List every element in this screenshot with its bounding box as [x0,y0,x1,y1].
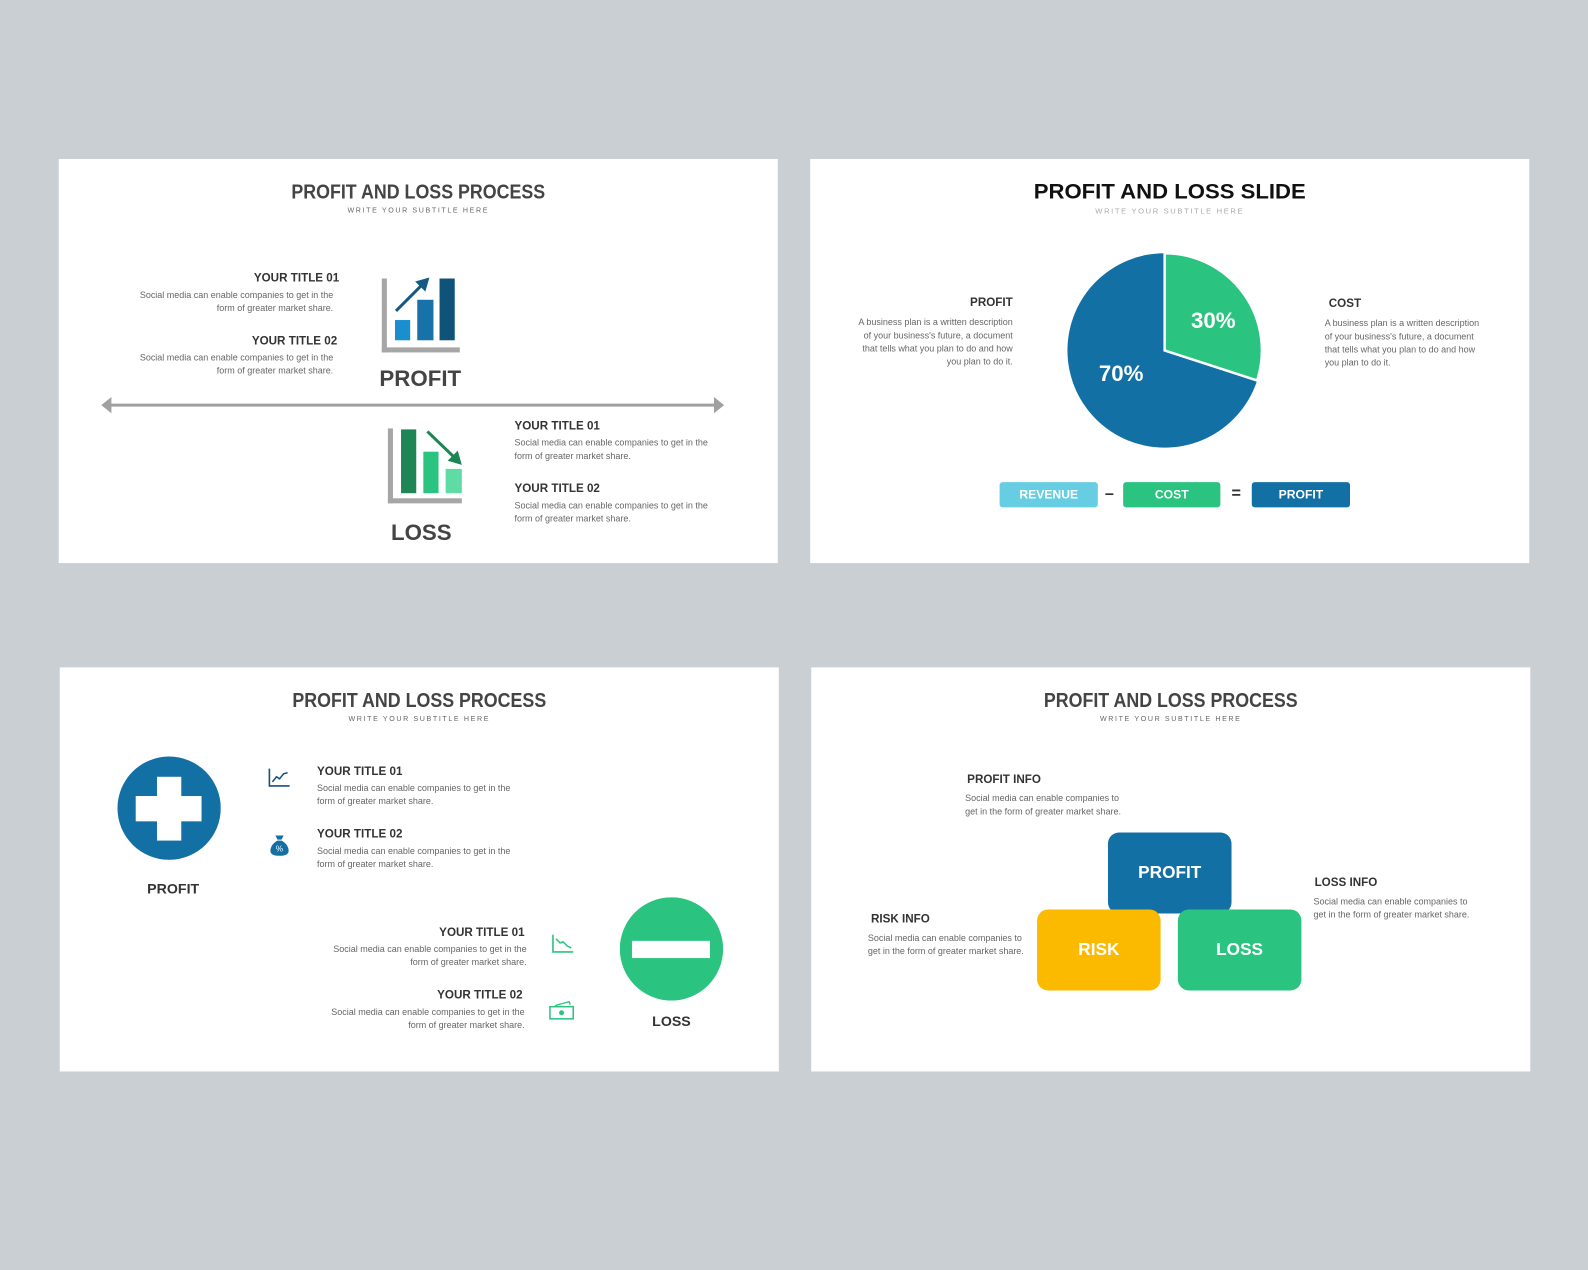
text block: risk info: get in the form of greater market share. [868,946,1024,956]
text block: loss title 02: YOUR TITLE 02 [437,989,523,1002]
pie chart: 70% [1099,361,1144,386]
label: LOSS: LOSS [391,520,452,545]
title: PROFIT AND LOSS PROCESS [291,181,545,204]
text block: cost: of your business's future, a document [1325,331,1474,341]
text block: loss title 02: Social media can enable companies to get in the [514,500,708,510]
text block: loss info [1314,877,1469,920]
text block: loss info: get in the form of greater market share. [1314,909,1469,920]
text block: profit: PROFIT [970,297,1013,309]
subtitle: WRITE YOUR SUBTITLE HERE [1095,207,1244,216]
text block: title 01: Social media can enable companies to get in the [317,783,510,793]
title: PROFIT AND LOSS PROCESS [292,690,546,712]
text block: loss title 02: form of greater market share. [408,1020,525,1030]
text block: loss title 02: form of greater market share. [514,513,631,524]
text block: loss title 01: Social media can enable companies to get in the [514,438,708,448]
text block: loss title 01: form of greater market share. [514,451,631,461]
text block: profit title 02: YOUR TITLE 02 [252,335,337,347]
equation: revenue - cost = profit: COST [1155,487,1189,501]
text block: profit info: get in the form of greater market share. [965,806,1121,816]
text block: cost: that tells what you plan to do and how [1325,344,1475,354]
text block: profit info [965,774,1121,816]
text block: profit: of your business's future, a document [864,330,1013,340]
text block: risk info: Social media can enable companies to [868,933,1022,943]
box: RISK: RISK [1078,940,1119,959]
arrow: double-headed axis [101,397,724,414]
text block: title 02: form of greater market share. [317,859,433,869]
text block: profit: that tells what you plan to do and how [862,343,1013,353]
box: LOSS [1178,909,1301,990]
title: PROFIT AND LOSS SLIDE [1034,180,1306,204]
icon: money bag [270,836,289,856]
box: PROFIT: PROFIT [1138,863,1201,882]
label: PROFIT: PROFIT [379,366,461,391]
text block: profit title 01 [140,272,339,313]
text block: loss title 02 [514,483,708,524]
text block: loss title 01 [333,927,527,967]
text block: title 01: form of greater market share. [317,796,433,806]
equation: revenue - cost = profit: = [1232,485,1241,502]
text block: title 02 [317,828,510,869]
text block: profit title 01: form of greater market share. [217,303,333,313]
icon: plus circle [118,756,221,860]
icon: money bag: % [276,845,283,854]
text block: loss title 01: Social media can enable companies to get in the [333,944,527,954]
equation: revenue - cost = profit [1000,482,1350,508]
text block: profit: you plan to do it. [947,356,1013,367]
text block: cost: you plan to do it. [1325,358,1391,368]
icon: cash [549,1000,574,1020]
text block: title 02: YOUR TITLE 02 [317,828,402,841]
equation: revenue - cost = profit: – [1105,485,1114,502]
label: LOSS: LOSS [652,1013,691,1029]
text block: cost: COST [1329,298,1361,310]
equation: revenue - cost = profit: REVENUE [1019,487,1078,501]
pie chart: 30% [1191,308,1236,333]
text block: loss info: Social media can enable companies to [1314,896,1467,906]
text block: cost [1324,298,1479,368]
text block: profit title 02: Social media can enable companies to get in the [140,352,333,363]
icon: falling chart [552,934,574,953]
text block: loss title 01: form of greater market share. [410,957,527,967]
panel: profit and loss process (boxes) [811,667,1530,1072]
text block: profit title 01: YOUR TITLE 01 [254,272,339,285]
text block: title 02: Social media can enable companies to get in the [317,846,510,856]
pie chart [1067,253,1261,448]
text block: profit info: Social media can enable companies to [965,793,1119,803]
panel: profit and loss process (arrow) [59,159,778,563]
label: PROFIT: PROFIT [147,880,199,896]
text block: profit info: PROFIT INFO [967,774,1041,786]
text block: loss title 01: YOUR TITLE 01 [439,927,525,939]
box: LOSS: LOSS [1216,940,1263,959]
text block: risk info [868,914,1024,956]
subtitle: WRITE YOUR SUBTITLE HERE [347,208,489,215]
text block: loss title 02: Social media can enable companies to get in the [331,1007,525,1017]
text block: profit: A business plan is a written description [858,317,1013,327]
panel: profit and loss process (plus/minus) [60,667,779,1072]
text block: profit title 02 [140,335,337,376]
text block: profit title 01: Social media can enable companies to get in the [140,290,333,300]
text block: loss info: LOSS INFO [1315,877,1377,889]
icon: minus circle [620,897,724,1001]
text block: risk info: RISK INFO [871,914,930,926]
equation: revenue - cost = profit: PROFIT [1279,487,1323,501]
title: PROFIT AND LOSS PROCESS [1044,690,1298,712]
icon: profit bar chart [382,278,460,352]
box: RISK [1037,909,1161,990]
panel: profit and loss slide (pie) [810,159,1529,563]
subtitle: WRITE YOUR SUBTITLE HERE [1100,716,1242,723]
text block: loss title 02 [331,989,525,1030]
text block: title 01 [317,766,510,806]
text block: cost: A business plan is a written description [1325,318,1479,328]
text block: loss title 01: YOUR TITLE 01 [514,420,600,432]
text block: profit [858,297,1013,367]
text block: loss title 01 [514,420,708,461]
subtitle: WRITE YOUR SUBTITLE HERE [348,716,490,723]
box: PROFIT [1108,832,1232,914]
text block: title 01: YOUR TITLE 01 [317,766,402,778]
icon: rising chart [268,768,290,787]
text block: loss title 02: YOUR TITLE 02 [514,483,600,495]
text block: profit title 02: form of greater market share. [217,366,333,376]
icon: loss bar chart [388,428,462,504]
